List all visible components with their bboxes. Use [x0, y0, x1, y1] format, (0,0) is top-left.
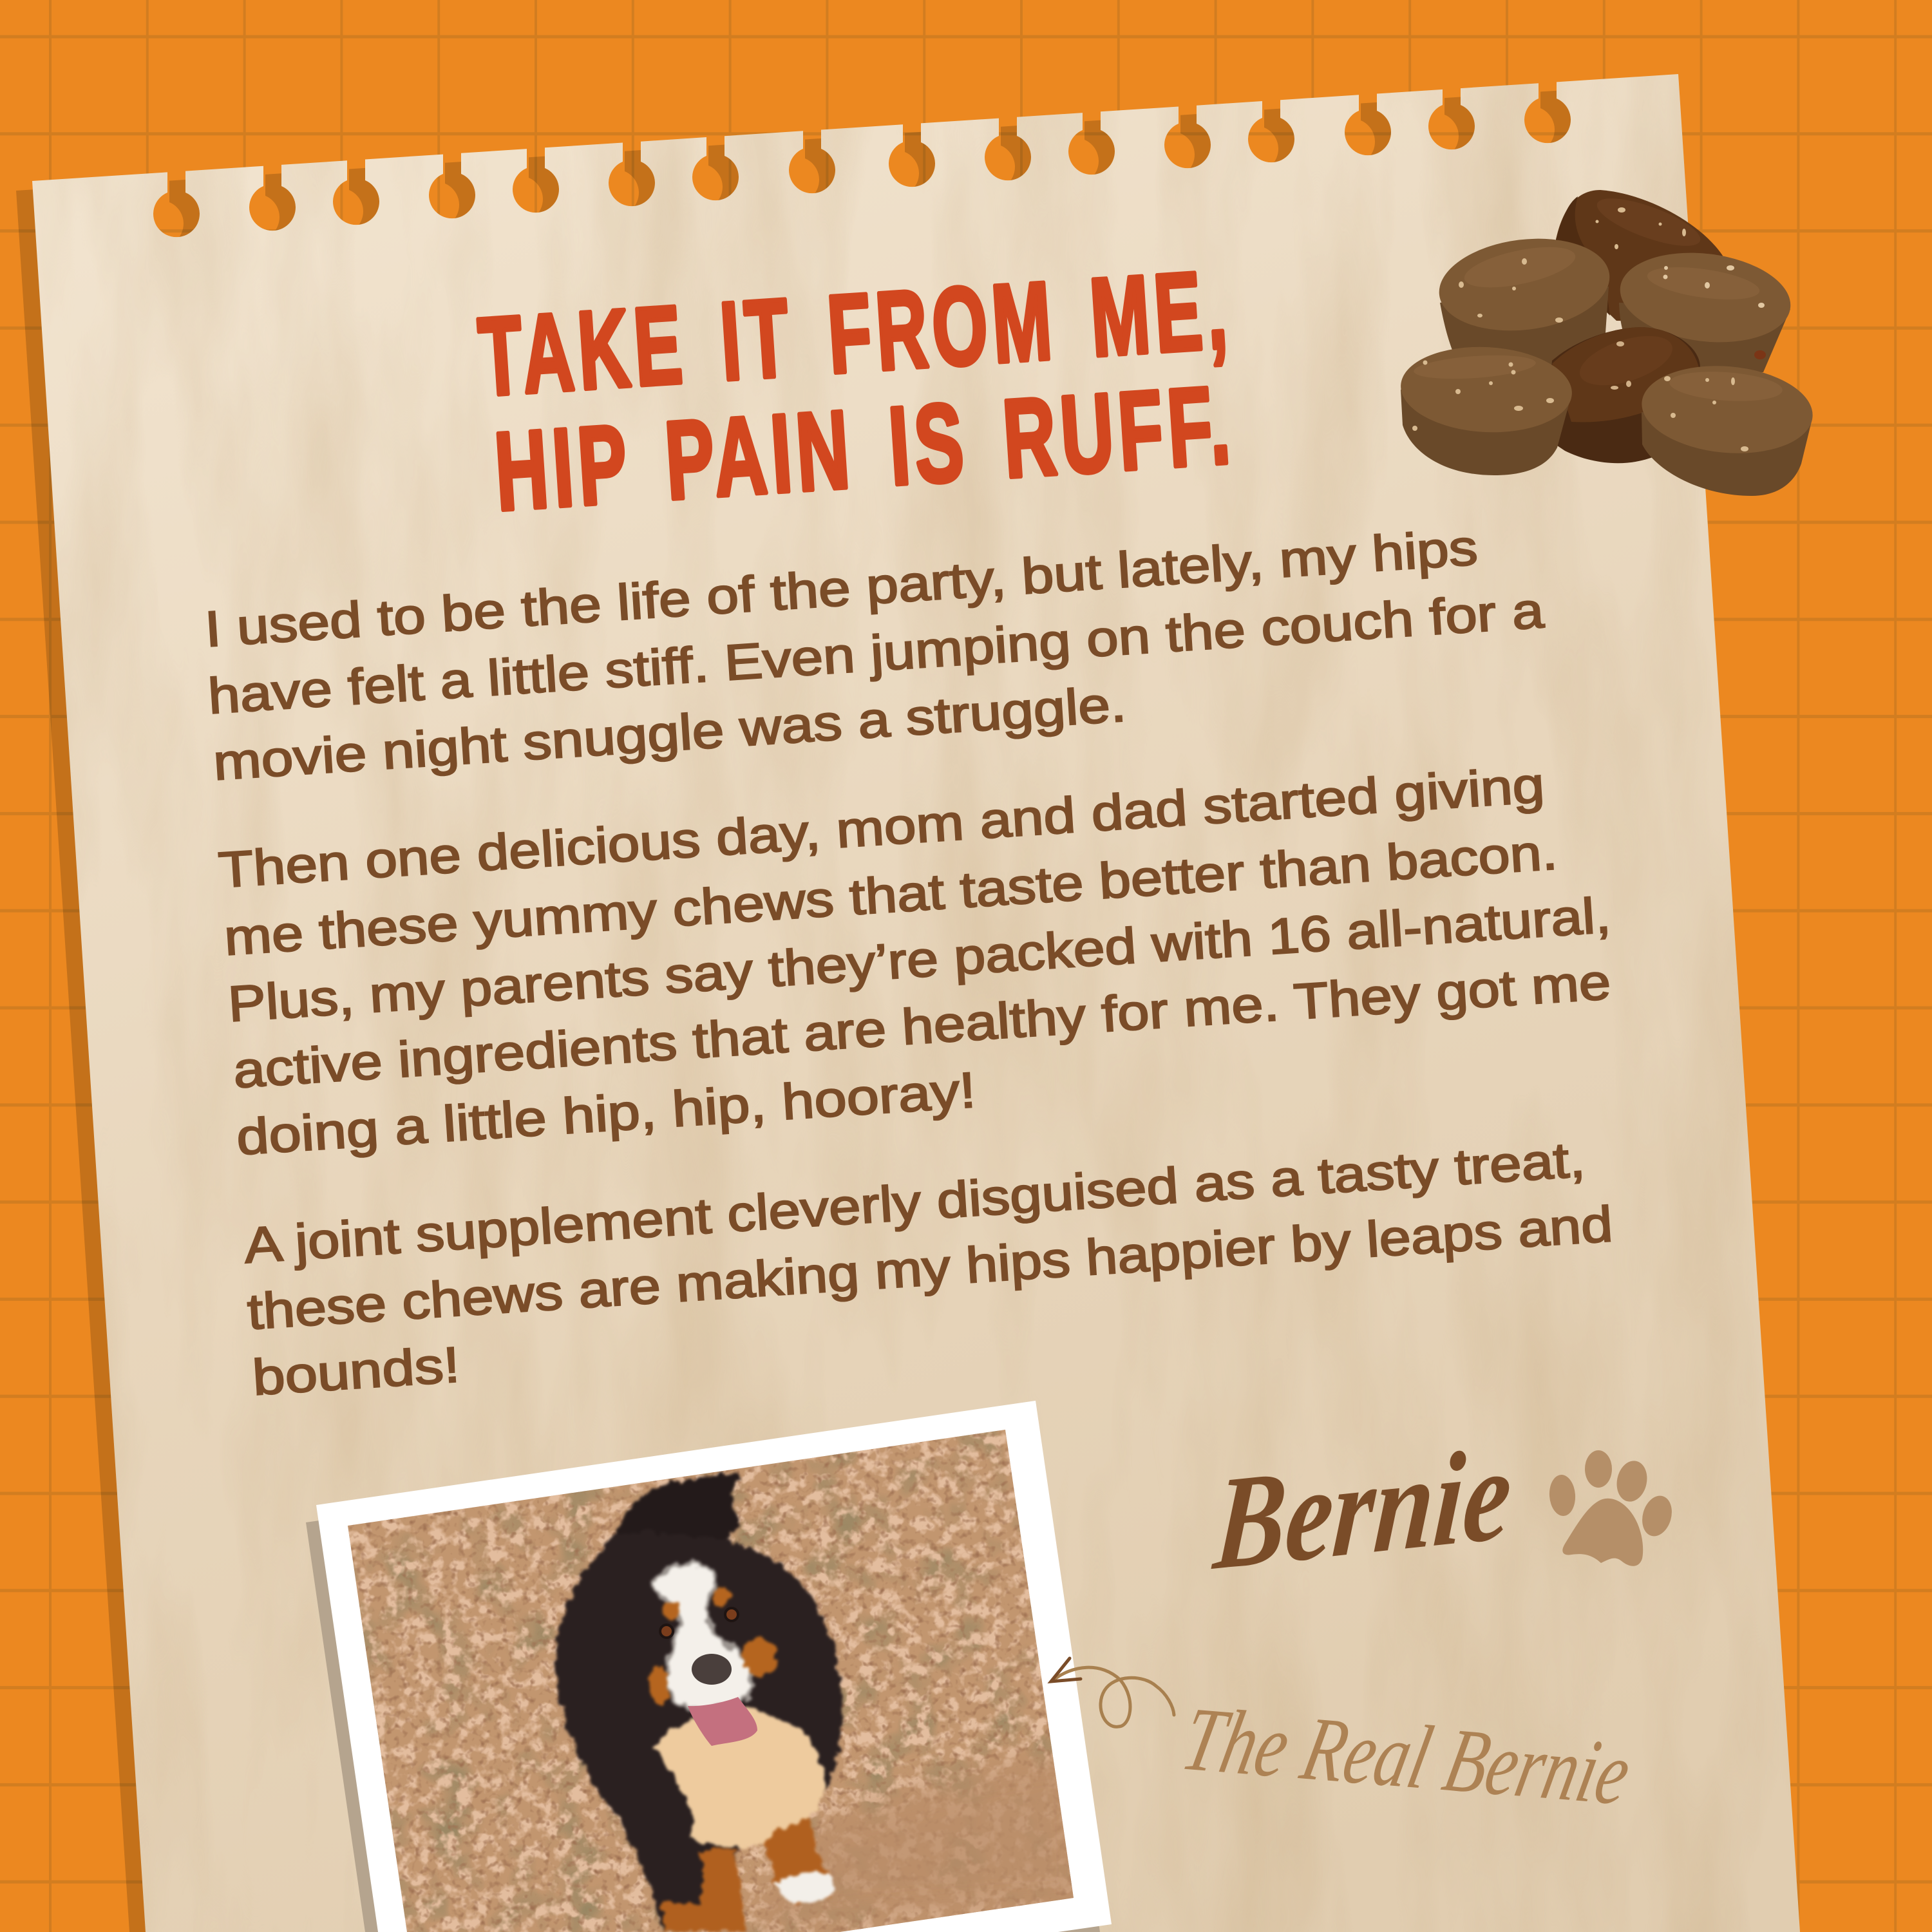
- text block: paragraph one: have felt a little stiff. Even jumping on the couch for a: [206, 582, 1546, 724]
- dog chest: [654, 1709, 824, 1847]
- dog left leg: [663, 1848, 746, 1932]
- caption: The Real Bernie: The Real Bernie: [1174, 1688, 1640, 1824]
- text block: paragraph one: I used to be the life of the party, but lately, my hips: [203, 518, 1479, 658]
- dog body: [555, 1533, 842, 1932]
- text block: paragraph two: doing a little hip, hip, hooray!: [234, 1061, 978, 1166]
- heading: take it from me, hip pain is ruff: HIP PAIN IS RUFF.: [491, 363, 1238, 534]
- chew: lower left: [1399, 343, 1574, 475]
- text block: paragraph two: active ingredients that are healthy for me. They got me: [231, 953, 1613, 1099]
- text block: paragraph three: these chews are making my hips happier by leaps and: [245, 1195, 1615, 1340]
- signature: Bernie: Bernie: [1209, 1419, 1516, 1598]
- text block: paragraph one: [203, 518, 1546, 791]
- text block: paragraph three: bounds!: [251, 1336, 461, 1406]
- chew: upper left: [1434, 229, 1615, 386]
- arrow: curly arrow pointing to photo: [1051, 1658, 1174, 1727]
- photo: framed picture of the real Bernie: [316, 1401, 1112, 1932]
- chew: center dark: [1546, 326, 1713, 463]
- dog blaze and muzzle: [650, 1564, 753, 1710]
- ground with fallen leaves: [335, 1417, 1088, 1932]
- dog eyes: [659, 1607, 739, 1639]
- dog tongue: [688, 1697, 757, 1746]
- dog fur shapes: [555, 1473, 842, 1932]
- heading: take it from me, hip pain is ruff: [475, 247, 1238, 534]
- chew: upper right: [1615, 243, 1795, 372]
- text block: paragraph three: A joint supplement cleverly disguised as a tasty treat,: [242, 1131, 1587, 1274]
- dog tail: [616, 1473, 741, 1552]
- text block: paragraph two: Then one delicious day, mom and dad started giving: [216, 756, 1546, 898]
- heading: take it from me, hip pain is ruff: TAKE IT FROM ME,: [475, 247, 1235, 419]
- dog tan brows and cheeks: [650, 1587, 777, 1705]
- dog photo: [335, 1417, 1088, 1932]
- text block: paragraph three: [242, 1131, 1615, 1406]
- dog nose: [692, 1654, 732, 1685]
- chew: back dark: [1556, 189, 1723, 322]
- text block: paragraph two: [216, 756, 1613, 1166]
- photo frame: [316, 1401, 1112, 1932]
- icon: pile of chews: [1399, 189, 1816, 496]
- photo frame shadow: [306, 1418, 1100, 1932]
- dog right leg and paw: [765, 1817, 835, 1905]
- text block: paragraph two: Plus, my parents say they’re packed with 16 all-natural,: [226, 886, 1613, 1032]
- chew: lower right: [1638, 359, 1816, 496]
- text block: paragraph two: me these yummy chews that taste better than bacon.: [222, 823, 1559, 966]
- text block: paragraph one: movie night snuggle was a struggle.: [211, 676, 1128, 791]
- icon: paw print: [1548, 1450, 1676, 1566]
